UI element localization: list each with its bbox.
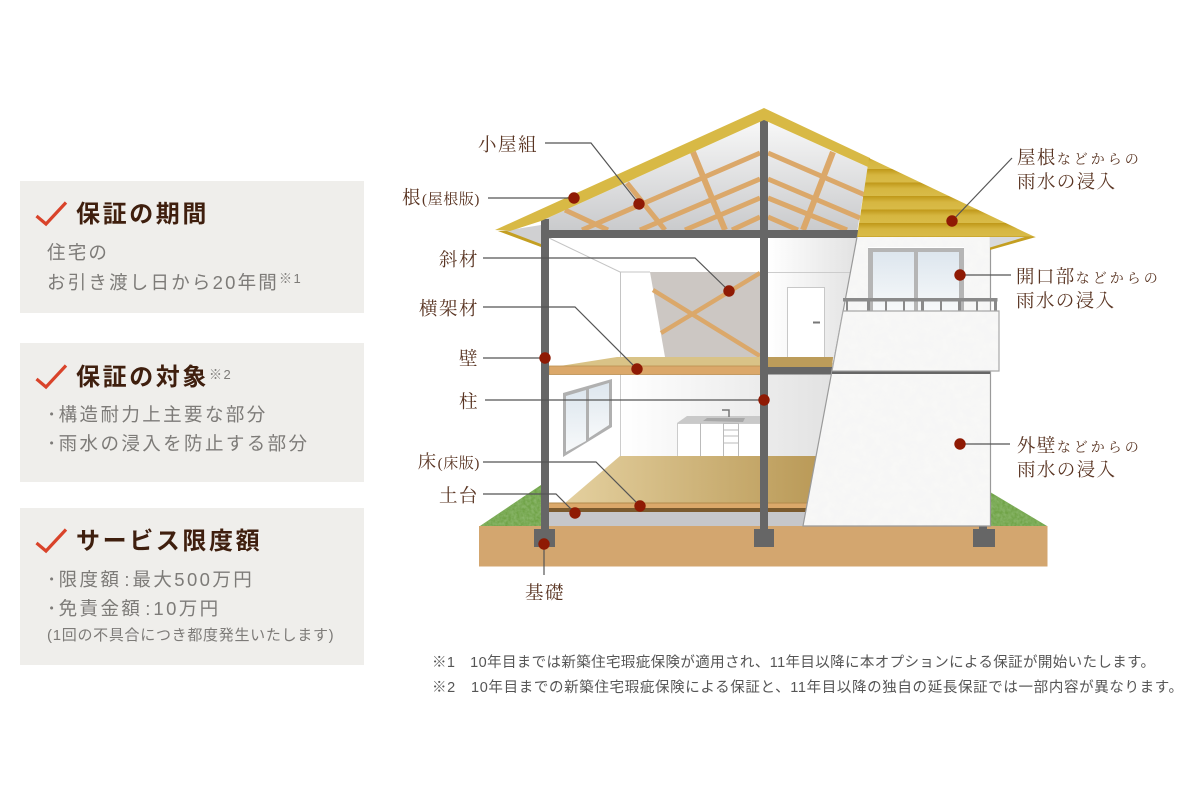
- window: upper floor: [868, 247, 964, 311]
- labels: structure parts: 土台: [439, 486, 479, 507]
- first floor boards: [549, 456, 816, 512]
- labels: rainwater intrusion: 雨水の浸入: [1017, 460, 1117, 481]
- labels: structure parts: 壁: [459, 349, 479, 370]
- labels: rainwater intrusion: 屋根などからの: [1017, 148, 1142, 169]
- leader lines: [483, 143, 1012, 575]
- roof trusses: [565, 152, 865, 230]
- first floor room: [549, 374, 832, 512]
- labels: rainwater intrusion: 雨水の浸入: [1017, 172, 1117, 193]
- braces: [653, 273, 760, 356]
- icon: check mark: [36, 528, 68, 554]
- panel: service limit: [20, 508, 364, 665]
- text: service limit body: ･限度額:最大500万円: [47, 569, 254, 590]
- text: guarantee scope body: ･構造耐力上主要な部分: [47, 404, 268, 425]
- kitchen counter: [677, 410, 760, 460]
- attic and truss: [503, 120, 868, 245]
- labels: rainwater intrusion: 外壁などからの: [1017, 436, 1142, 457]
- text: guarantee scope body: [47, 404, 309, 454]
- labels: rainwater intrusion: [1016, 148, 1161, 481]
- structural frame: [534, 120, 995, 547]
- marker dots: [538, 192, 966, 550]
- text: service limit body: ･免責金額:10万円: [47, 598, 221, 619]
- footnotes: ※1 10年目までは新築住宅瑕疵保険が適用され、11年目以降に本オプションによる保証が開始いたします。: [432, 653, 1155, 671]
- footnotes: ※2 10年目までの新築住宅瑕疵保険による保証と、11年目以降の独自の延長保証では一部内容が異なります。: [432, 678, 1183, 696]
- text: guarantee period body: 住宅の: [47, 242, 109, 263]
- labels: structure parts: 斜材: [439, 250, 479, 271]
- footnotes: [432, 653, 1183, 696]
- panel: guarantee period: [20, 181, 364, 313]
- labels: structure parts: 根(屋根版): [402, 188, 480, 209]
- labels: rainwater intrusion: 開口部などからの: [1016, 267, 1161, 288]
- labels: structure parts: 基礎: [525, 583, 565, 604]
- heading: service limit: サービス限度額: [76, 528, 262, 555]
- text: guarantee period body: お引き渡し日から20年間※1: [47, 271, 302, 293]
- balcony panel: [832, 311, 999, 371]
- door: [788, 288, 824, 358]
- labels: structure parts: [402, 135, 565, 604]
- labels: rainwater intrusion: 雨水の浸入: [1016, 291, 1116, 312]
- icon: check mark: [36, 364, 68, 390]
- text: service limit body: [47, 569, 254, 619]
- labels: structure parts: 横架材: [419, 299, 479, 320]
- second floor room: [549, 238, 857, 374]
- icon: check mark: [36, 201, 68, 226]
- heading: guarantee period: 保証の期間: [76, 201, 209, 228]
- window: first floor: [563, 379, 612, 457]
- roof: [495, 108, 1036, 250]
- panel: guarantee scope: [20, 343, 364, 482]
- text: guarantee period body: [47, 242, 302, 293]
- labels: structure parts: 柱: [459, 392, 479, 413]
- second floor boards: [549, 357, 833, 374]
- text: guarantee scope body: ･雨水の浸入を防止する部分: [47, 433, 309, 454]
- heading: guarantee scope: 保証の対象※2: [76, 364, 232, 391]
- exterior wall: [803, 237, 999, 526]
- labels: structure parts: 小屋組: [478, 135, 538, 156]
- balcony railing: [843, 298, 998, 311]
- ground and grass: [479, 485, 1048, 566]
- text: service limit note: (1回の不具合につき都度発生いたします): [47, 627, 334, 644]
- labels: structure parts: 床(床版): [418, 451, 480, 473]
